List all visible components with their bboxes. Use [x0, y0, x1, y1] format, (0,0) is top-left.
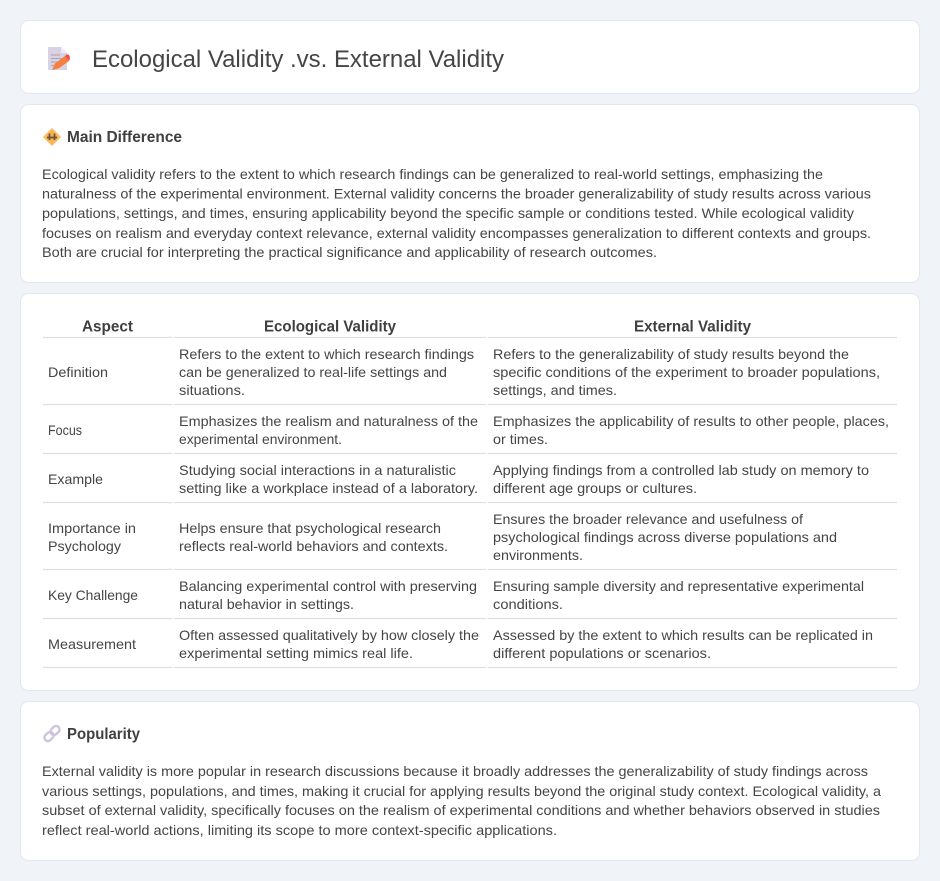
- table row: focus: Emphasizes the applicability of results to other people, places,: [493, 413, 889, 429]
- table row: focus: [48, 413, 889, 447]
- heading: main difference: Main Difference: [67, 129, 182, 146]
- panel: main difference: [20, 104, 920, 282]
- table row: definition: can be generalized to real-life settings and: [179, 364, 447, 380]
- table row: importance in psychology: Importance in: [48, 520, 136, 536]
- table row: example: setting like a workplace instead of a laboratory.: [179, 480, 478, 496]
- table row: key challenge: Ensuring sample diversity and representative experimental: [493, 578, 864, 594]
- table row: example: different age groups or cultures.: [493, 480, 697, 496]
- table row: importance in psychology: [48, 511, 837, 563]
- table row: definition: situations.: [179, 382, 245, 398]
- table row: measurement: experimental setting mimics real life.: [179, 645, 413, 661]
- table row: key challenge: conditions.: [493, 596, 563, 612]
- table row: measurement: Measurement: [48, 636, 136, 652]
- text block: popularity paragraph: subset of external validity, specifically focuses on the realism of experimental conditions and whether behaviors observed in studies: [42, 802, 880, 818]
- text block: main difference paragraph: populations, settings, and times, ensuring applicability beyond the specific sample or conditions tested. While ecological validity: [42, 205, 854, 221]
- table row: focus: Emphasizes the realism and naturalness of the: [179, 413, 478, 429]
- table row: focus: or times.: [493, 431, 548, 447]
- icon: warning diamond: [44, 128, 60, 146]
- table row: key challenge: Balancing experimental control with preserving: [179, 578, 477, 594]
- table row: definition: settings, and times.: [493, 382, 617, 398]
- table row: importance in psychology: reflects real-world behaviors and contexts.: [179, 538, 448, 554]
- table row: example: [48, 462, 869, 496]
- table row: example: Studying social interactions in a naturalistic: [179, 462, 456, 478]
- table row: key challenge: Key Challenge: [48, 587, 138, 603]
- table header: Aspect: [82, 318, 134, 336]
- table row: definition: Definition: [48, 364, 108, 380]
- table row: measurement: Assessed by the extent to which results can be replicated in: [493, 627, 873, 643]
- table row: example: Example: [48, 471, 103, 487]
- table row: key challenge: natural behavior in settings.: [179, 596, 354, 612]
- table header: Ecological Validity: [264, 318, 396, 336]
- table row: definition: [48, 346, 880, 398]
- text block: main difference paragraph: Ecological validity refers to the extent to which research findings can be generalized to real-world settings, emphasizing the: [42, 166, 823, 182]
- table row: example: Applying findings from a controlled lab study on memory to: [493, 462, 869, 478]
- text block: popularity paragraph: various settings, populations, and times, making it crucial for applying results beyond the original study context. Ecological validity, a: [42, 783, 881, 799]
- table row: key challenge: [48, 578, 864, 612]
- text block: main difference paragraph: [42, 166, 871, 260]
- icon: chain link: [43, 724, 61, 743]
- panel: title header: [20, 20, 920, 94]
- table row: importance in psychology: Ensures the broader relevance and usefulness of: [493, 511, 803, 527]
- panel: comparison table: [20, 294, 920, 690]
- table row: focus: Focus: [48, 422, 82, 438]
- table row: measurement: different populations or scenarios.: [493, 645, 711, 661]
- title: Ecological Validity .vs. External Validity: [92, 46, 504, 73]
- text block: popularity paragraph: reflect real-world actions, limiting its scope to more context-specific applications.: [42, 822, 557, 838]
- text block: popularity paragraph: External validity is more popular in research discussions because it broadly addresses the generalizability of study findings across: [42, 763, 868, 779]
- text block: main difference paragraph: Both are crucial for interpreting the practical significance and applicability of research outcomes.: [42, 244, 657, 260]
- table row: focus: experimental environment.: [179, 431, 342, 447]
- heading: popularity: Popularity: [67, 726, 140, 743]
- table row: importance in psychology: Helps ensure that psychological research: [179, 520, 441, 536]
- table row: measurement: Often assessed qualitatively by how closely the: [179, 627, 479, 643]
- table row: definition: specific conditions of the experiment to broader populations,: [493, 364, 880, 380]
- text block: main difference paragraph: focuses on realism and everyday context relevance, external validity encompasses generalization to different contexts and groups.: [42, 225, 871, 241]
- table row: definition: Refers to the generalizability of study results beyond the: [493, 346, 849, 362]
- table header: [82, 318, 751, 336]
- table row: importance in psychology: environments.: [493, 547, 583, 563]
- panel: popularity: [20, 702, 920, 860]
- text block: main difference paragraph: naturalness of the experimental environment. External validity concerns the broader generalizability of study results across various: [42, 186, 871, 202]
- text block: popularity paragraph: [42, 763, 881, 838]
- table header: External Validity: [634, 318, 751, 336]
- table row: definition: Refers to the extent to which research findings: [179, 346, 474, 362]
- table row: importance in psychology: psychological findings across diverse populations and: [493, 529, 837, 545]
- table row: measurement: [48, 627, 873, 661]
- icon: document with pencil: [48, 47, 70, 70]
- table row: importance in psychology: Psychology: [48, 538, 121, 554]
